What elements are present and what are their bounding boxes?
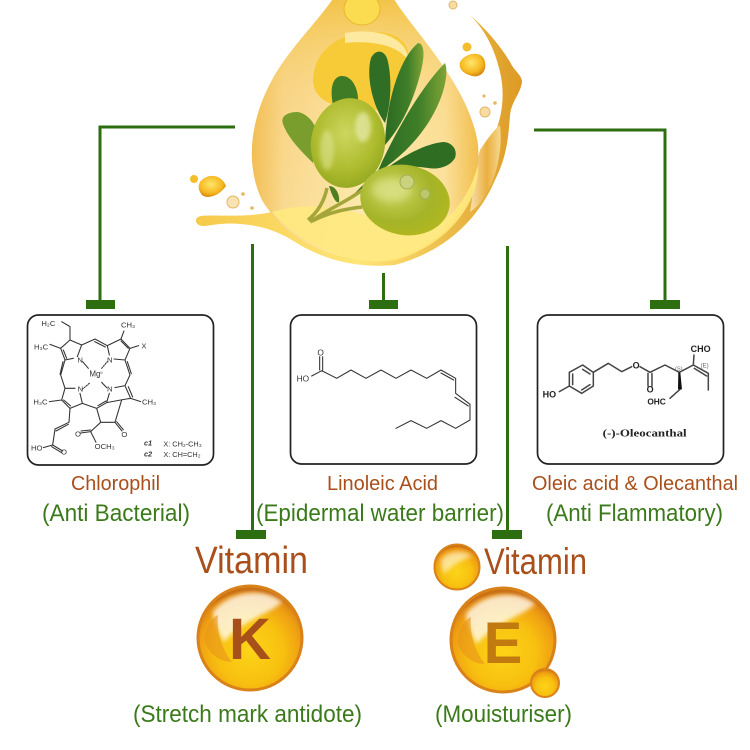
icon: vitamin K capsule: K [229,607,271,672]
molecule: chlorophil: HO [31,444,43,453]
connector bar: vitamin K [236,530,266,539]
molecule: linoleic acid [297,348,470,428]
molecule: chlorophil: O [75,429,81,438]
molecule: chlorophil: CH₃ [121,321,135,330]
molecule: chlorophil: OCH₃ [95,442,115,451]
molecule: chlorophil: N [78,385,83,394]
heading: vitamin E: Vitamin [484,541,587,582]
icon: small vitamin droplet [434,544,480,590]
molecule: chlorophil: H₃C [34,342,49,351]
top droplet [344,0,380,25]
molecule: chlorophil: X: CH₂-CH₃ [163,439,202,448]
connector: drop to oleic acid [534,130,665,302]
lower oil sheen [272,165,478,261]
panel: linoleic acid structure [290,315,476,464]
molecule: oleocanthal: (E) [701,363,709,369]
molecule: chlorophil: Mg [89,370,100,379]
molecule: chlorophil: O [121,430,127,439]
olive stem [308,188,362,222]
molecule: chlorophil: O [61,447,67,456]
molecule: chlorophil: c2 [144,449,152,458]
molecule: chlorophil [31,319,202,459]
molecule: chlorophil: N [107,385,113,394]
connector: drop to chlorophil [100,127,235,302]
molecule: chlorophil: II [100,370,103,375]
connector bar: oleic acid [650,300,680,309]
heading: vitamin K: Vitamin [195,540,308,582]
molecule: oleocanthal: OHC [647,397,666,407]
label: anti flammatory: (Anti Flammatory) [546,500,723,527]
olive: lower [355,158,455,242]
molecule: chlorophil: H₃C [33,397,48,406]
panel: chlorophil structure [28,315,214,465]
label: chlorophil: Chlorophil [71,473,160,495]
oil drop illustration with olives [190,0,522,266]
molecule: oleocanthal: CHO [691,344,711,354]
molecule: oleocanthal: (-)-Oleocanthal [603,429,687,440]
icon: vitamin K capsule [198,586,302,690]
molecule: chlorophil: CH₃ [142,397,156,406]
molecule: chlorophil: X [141,342,146,351]
molecule: oleocanthal: (S) [675,367,683,373]
caption: mouisturiser: (Mouisturiser) [435,701,572,728]
molecule: linoleic acid: HO [297,373,310,383]
drop body [252,0,478,260]
panel: oleocanthal structure [538,315,724,464]
molecule: chlorophil: X: CH=CH₂ [163,450,201,459]
connector bar: chlorophil [86,300,115,309]
molecule: linoleic acid: O [317,348,324,358]
molecule: chlorophil: H₂C [41,319,56,328]
molecule: chlorophil: N [107,355,113,364]
molecule: oleocanthal: HO [543,390,556,400]
olive leaves [282,43,456,202]
connector bar: linoleic acid [369,300,398,309]
caption: stretch mark antidote: (Stretch mark antidote) [133,701,362,728]
label: anti bacterial: (Anti Bacterial) [42,500,190,527]
inner swirl [313,32,409,110]
molecule: oleocanthal [543,344,711,440]
label: linoleic acid: Linoleic Acid [327,473,438,495]
molecule: chlorophil: N [77,355,83,364]
oil splash [196,15,522,266]
connector: drop to linoleic acid [382,273,385,301]
icon: vitamin E capsule [451,588,559,697]
connector bar: vitamin E [492,530,522,539]
droplets [190,1,497,210]
connector: drop to vitamin K [251,244,254,531]
connector: drop to vitamin E [506,246,509,531]
molecule: oleocanthal: O [647,385,654,395]
icon: vitamin E capsule: E [484,611,522,676]
label: oleic acid and olecanthal: Oleic acid & Olecanthal [532,473,738,495]
olive: upper [305,93,391,193]
label: epidermal water barrier: (Epidermal water barrier) [256,500,504,527]
molecule: oleocanthal: O [633,361,640,371]
molecule: chlorophil: c1 [144,439,152,448]
